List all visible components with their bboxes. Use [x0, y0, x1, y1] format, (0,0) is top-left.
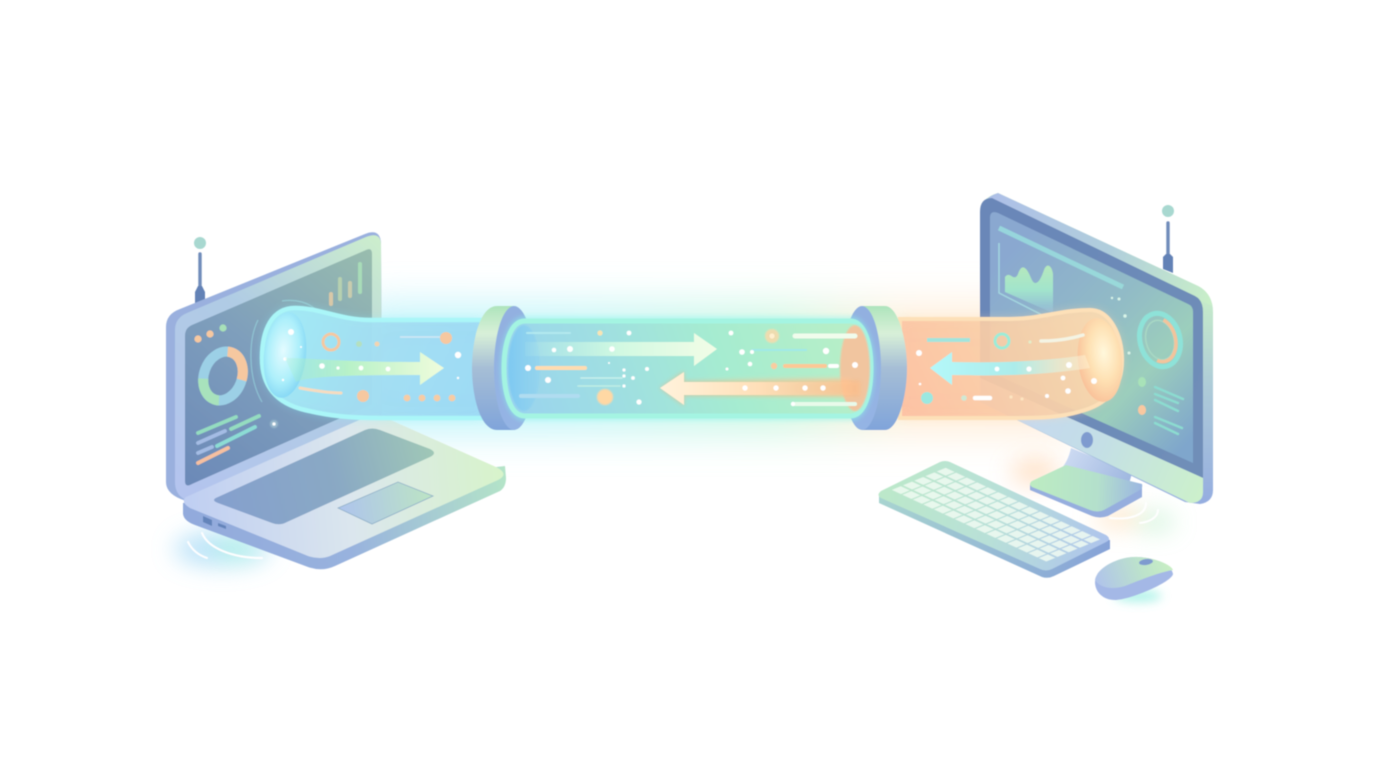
right tube mouth [1074, 316, 1126, 404]
monitor top bevel [980, 193, 1212, 306]
monitor stand [1030, 448, 1142, 518]
mouse top [1095, 557, 1173, 588]
laptop base top [184, 413, 504, 558]
laptop lid bezel [175, 235, 382, 500]
right tube body [900, 310, 1122, 418]
laptop screen text lines [198, 416, 259, 463]
left tube mouth [260, 310, 310, 400]
artwork wrapper [166, 193, 1213, 602]
laptop screen spark [270, 420, 278, 428]
glowing orange particles [597, 329, 779, 405]
monitor dark bezel [980, 198, 1203, 478]
left flange [472, 306, 534, 430]
right flange [843, 306, 907, 430]
right tube glow [900, 310, 1122, 418]
laptop ports [203, 516, 226, 529]
monitor screen legend [1138, 377, 1183, 434]
motion arcs: under laptop [188, 533, 262, 558]
laptop screen status dots [194, 324, 227, 343]
monitor screen dots [1111, 297, 1130, 354]
left-pointing arrow [660, 371, 860, 406]
central tube left opening [508, 325, 540, 411]
left tube glow [262, 308, 483, 418]
tube: central glass section [503, 319, 872, 418]
left tube arrow dots [319, 363, 390, 371]
data particles [525, 330, 858, 406]
right flange band [862, 306, 907, 430]
right-pointing arrow [525, 333, 717, 366]
stand neck [1060, 448, 1132, 495]
monitor screen header line [999, 228, 1123, 287]
data streaks [521, 333, 855, 404]
warm light band [690, 378, 850, 396]
monitor [980, 193, 1213, 504]
monitor chin [980, 378, 1203, 503]
left tube arrow [285, 352, 444, 385]
icon: laptop antenna [194, 237, 206, 308]
stand foot side [1030, 484, 1142, 518]
stand foot top [1030, 465, 1142, 512]
glow: around tunnel [340, 305, 1100, 433]
glow: under mouse [1114, 590, 1162, 602]
mouse [1095, 557, 1173, 600]
glow: under monitor stand [1011, 461, 1175, 531]
right tube arrow [930, 352, 1090, 385]
left flange rim [494, 306, 534, 430]
central tube glow [503, 319, 872, 418]
monitor logo [1081, 432, 1093, 448]
central tube right opening [840, 325, 870, 411]
tube: left section entering laptop screen [251, 300, 483, 418]
monitor screen area chart [999, 243, 1053, 318]
laptop base side [183, 466, 506, 569]
keyboard side [879, 495, 1110, 578]
right tube arrow dots [995, 362, 1097, 398]
laptop keyboard deck [214, 428, 434, 524]
left flange band [472, 306, 515, 430]
laptop trackpad [338, 482, 433, 524]
left tube mouth sparks [282, 329, 302, 381]
laptop lid [166, 232, 382, 502]
right flange rim [843, 306, 881, 430]
mouse wheel [1139, 558, 1153, 566]
screen halo arcs [251, 300, 318, 402]
keyboard keys [890, 467, 1101, 562]
mouse shell [1095, 557, 1173, 600]
monitor screen donut chart [1134, 309, 1186, 371]
icon: monitor antenna [1162, 205, 1174, 273]
right tube ring and dots [916, 334, 1083, 404]
left tube ring and dots [300, 332, 461, 402]
keyboard [878, 461, 1110, 578]
laptop [166, 232, 506, 569]
tube: right section entering monitor screen [900, 310, 1126, 418]
monitor screen [990, 212, 1193, 463]
laptop screen donut chart [197, 346, 249, 406]
motion arcs: under monitor [1110, 503, 1158, 523]
glow: under laptop [174, 532, 270, 566]
laptop screen [185, 249, 372, 485]
keyboard top [878, 461, 1109, 570]
monitor casing [980, 193, 1213, 504]
laptop screen bar chart [331, 264, 360, 304]
central tube body [504, 321, 871, 416]
left tube body [262, 308, 483, 418]
